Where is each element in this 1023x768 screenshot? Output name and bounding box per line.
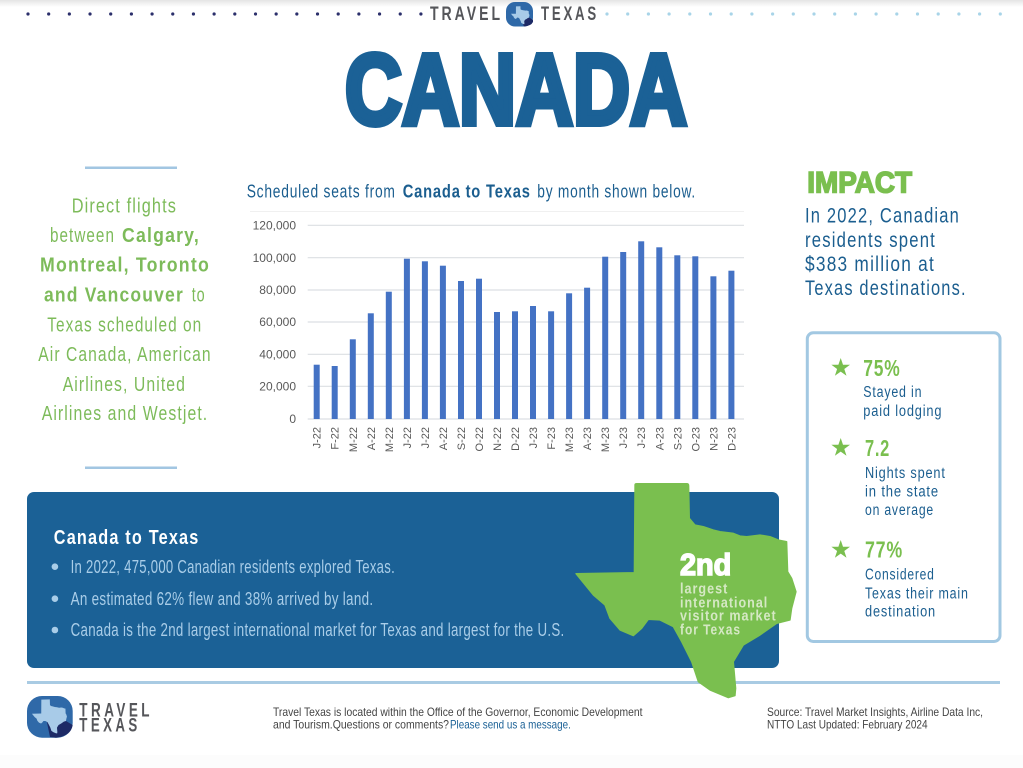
x axis labels: J-23 (528, 427, 540, 448)
panel: Canada to Texas (27, 492, 779, 668)
x axis labels: A-23 (582, 427, 594, 450)
panel: direct flights text: Airlines, United (63, 373, 186, 396)
footer logo: TRAVEL (79, 700, 153, 722)
bullet list: In 2022, 475,000 Canadian residents explored Texas. (71, 557, 395, 577)
footer logo (27, 696, 153, 738)
x axis labels: A-22 (366, 427, 378, 450)
x axis labels: J-22 (312, 427, 324, 448)
y axis labels: 100,000 (253, 251, 296, 265)
panel: direct flights text: Calgary, (122, 224, 200, 247)
bullet list: An estimated 62% flew and 38% arrived by land. (71, 589, 373, 609)
x axis labels: M-23 (564, 427, 576, 452)
y axis labels: 40,000 (259, 348, 296, 362)
bullet list (52, 557, 565, 640)
footer divider (27, 681, 1000, 684)
stat: main destination: Texas their main (865, 585, 969, 602)
x axis labels: F-22 (330, 427, 342, 450)
footer text (273, 705, 643, 732)
Texas map callout: for Texas (680, 621, 741, 638)
Texas map callout: largest (680, 580, 728, 597)
stat: main destination (831, 537, 969, 621)
panel: direct flights text: Air Canada, American (38, 343, 212, 366)
x axis labels: A-23 (654, 427, 666, 450)
x axis labels: D-22 (510, 427, 522, 451)
panel: direct flights text: Montreal, Toronto (40, 254, 210, 277)
panel: direct flights text: between (50, 224, 115, 247)
x axis labels: D-23 (726, 427, 738, 451)
footer logo: TEXAS (79, 714, 141, 736)
x axis labels: J-22 (420, 427, 432, 448)
header logo: TRAVEL (430, 4, 503, 25)
impact text: Texas destinations. (805, 277, 967, 300)
stat: nights spent (831, 435, 946, 519)
y axis labels: 20,000 (259, 380, 296, 394)
Texas map callout: 2nd (680, 547, 731, 582)
footer text: Travel Texas is located within the Office of the Governor, Economic Development (273, 705, 643, 719)
stat: nights spent: Nights spent (865, 465, 946, 482)
stat: nights spent: in the state (865, 484, 939, 501)
chart heading: by month shown below. (537, 182, 696, 202)
x axis labels: M-22 (384, 427, 396, 452)
footer text: Please send us a message. (450, 718, 571, 732)
stat: nights spent: 7.2 (865, 435, 890, 461)
Texas map callout (576, 484, 796, 698)
source note (767, 705, 983, 732)
header logo: TEXAS (541, 4, 599, 25)
x axis labels: J-23 (636, 427, 648, 448)
y axis labels: 60,000 (259, 315, 296, 329)
chart heading: Canada to Texas (403, 182, 531, 202)
x axis labels: S-22 (456, 427, 468, 450)
panel: direct flights text: and Vancouver (44, 284, 184, 307)
panel: direct flights text: Airlines and Westjet. (42, 402, 208, 425)
impact text: $383 million at (805, 253, 935, 276)
x axis labels: J-22 (402, 427, 414, 448)
impact heading: IMPACT (807, 166, 912, 200)
stat: main destination: Considered (865, 566, 935, 583)
stat: main destination: 77% (865, 537, 903, 563)
x axis labels: J-23 (618, 427, 630, 448)
footer text: and Tourism.Questions or comments? (273, 718, 449, 732)
x axis labels: A-22 (438, 427, 450, 450)
stat: main destination: destination (865, 604, 936, 621)
y axis labels: 120,000 (253, 218, 296, 232)
bar chart (250, 212, 744, 452)
x axis labels: O-23 (690, 427, 702, 451)
stat: paid lodging (831, 355, 942, 420)
x axis labels (312, 427, 738, 452)
header logo (430, 2, 599, 26)
panel heading: Canada to Texas (54, 526, 199, 549)
stat: paid lodging: paid lodging (863, 403, 942, 420)
x axis labels: M-22 (348, 427, 360, 452)
x axis labels: N-22 (492, 427, 504, 451)
x axis labels: F-23 (546, 427, 558, 450)
chart heading: Scheduled seats from (247, 182, 396, 202)
title: CANADA (345, 34, 687, 146)
panel: stats box (807, 333, 1000, 642)
impact text (805, 204, 967, 300)
header star rule (28, 12, 1001, 16)
stat: paid lodging: 75% (863, 355, 900, 381)
stat: paid lodging: Stayed in (863, 384, 922, 401)
x axis labels: O-22 (474, 427, 486, 451)
panel: direct flights text: to (192, 284, 206, 307)
Texas map callout: international (680, 594, 768, 611)
panel: direct flights text (38, 166, 212, 469)
panel: direct flights text: Texas scheduled on (47, 314, 202, 337)
bars (314, 241, 734, 419)
Texas map callout: visitor market (680, 608, 777, 625)
panel: direct flights text: Direct flights (72, 195, 177, 218)
source note: NTTO Last Updated: February 2024 (767, 718, 928, 732)
y axis labels: 80,000 (259, 283, 296, 297)
chart heading (247, 182, 696, 202)
impact text: In 2022, Canadian (805, 204, 960, 227)
x axis labels: S-23 (672, 427, 684, 450)
source note: Source: Travel Market Insights, Airline Data Inc, (767, 705, 983, 719)
x axis labels: M-23 (600, 427, 612, 452)
y axis labels: 0 (289, 412, 296, 426)
impact text: residents spent (805, 229, 936, 252)
x axis labels: N-23 (708, 427, 720, 451)
y axis labels (253, 218, 296, 426)
bullet list: Canada is the 2nd largest international market for Texas and largest for the U.S. (71, 620, 564, 640)
stat: nights spent: on average (865, 502, 934, 519)
